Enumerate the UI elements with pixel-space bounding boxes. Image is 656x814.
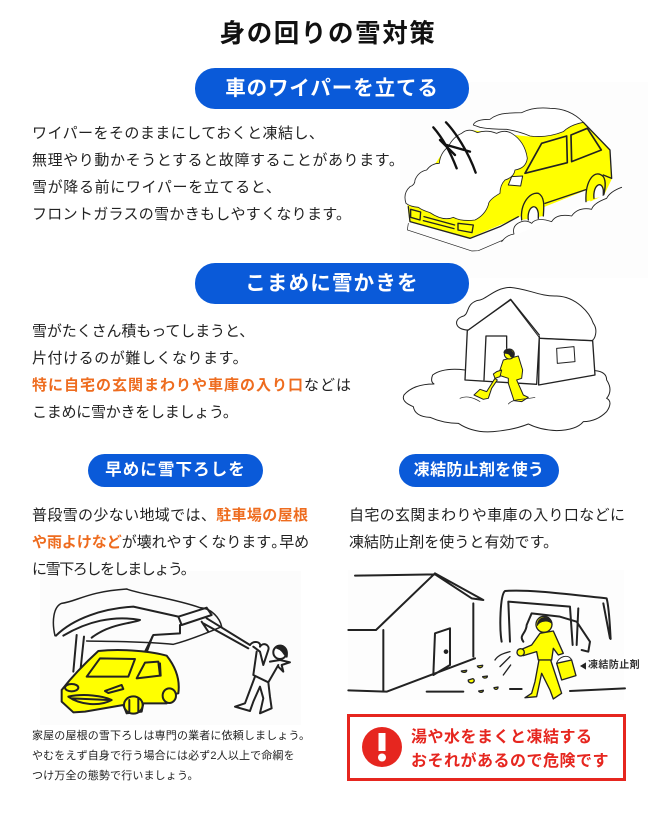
text: shovel snow: こまめに雪かきをしましょう。 — [32, 404, 238, 421]
heading: shovel snow — [195, 263, 469, 304]
text: caution about roof snow removal: やむをえず自身で行う場合には必ず2人以上で命綱を — [32, 750, 295, 762]
text: wiper: ワイパーをそのままにしておくと凍結し、 — [32, 125, 324, 142]
text: wiper — [32, 125, 404, 223]
text: caution about roof snow removal: つけ万全の態勢で行いましょう。 — [32, 770, 199, 782]
text: shovel snow: 雪がたくさん積もってしまうと、 — [32, 323, 254, 340]
text: wiper: フロントガラスの雪かきもしやすくなります。 — [32, 206, 351, 223]
text: antifreeze: 凍結防止剤を使うと有効です。 — [349, 534, 558, 551]
heading: wiper — [195, 68, 469, 109]
warning text: おそれがあるので危険です — [411, 753, 609, 770]
title: 身の回りの雪対策 — [220, 20, 436, 48]
text: roof snow — [32, 507, 309, 578]
heading: shovel snow: こまめに雪かきを — [245, 272, 419, 295]
heading: antifreeze: 凍結防止剤を使う — [414, 462, 544, 479]
text: roof snow: に雪下ろしをしましょう。 — [32, 561, 194, 578]
text: shovel snow: 片付けるのが難しくなります。 — [32, 350, 248, 367]
text: antifreeze — [349, 507, 625, 551]
warning text — [411, 728, 609, 770]
icon: exclamation mark — [362, 727, 402, 767]
callout: danger warning — [347, 714, 626, 781]
text: antifreeze: 自宅の玄関まわりや車庫の入り口などに — [349, 507, 625, 524]
heading: roof snow: 早めに雪下ろしを — [105, 461, 246, 479]
text: caution about roof snow removal — [32, 730, 310, 782]
text: roof snow: や雨よけなどが壊れやすくなります。早め — [32, 534, 309, 551]
heading: wiper: 車のワイパーを立てる — [225, 77, 439, 100]
heading: roof snow — [88, 454, 263, 487]
text: shovel snow — [32, 323, 352, 421]
text: caution about roof snow removal: 家屋の屋根の雪下ろしは専門の業者に依頼しましょう。 — [32, 730, 310, 742]
label: antifreeze: 凍結防止剤 — [588, 660, 640, 671]
text: wiper: 雪が降る前にワイパーを立てると、 — [32, 179, 282, 196]
text: shovel snow: 特に自宅の玄関まわりや車庫の入り口などは — [32, 377, 352, 394]
warning text: 湯や水をまくと凍結する — [411, 729, 593, 746]
text: wiper: 無理やり動かそうとすると故障することがあります。 — [32, 152, 404, 169]
heading: antifreeze — [399, 454, 559, 487]
text: roof snow: 普段雪の少ない地域では、駐車場の屋根 — [32, 507, 308, 524]
